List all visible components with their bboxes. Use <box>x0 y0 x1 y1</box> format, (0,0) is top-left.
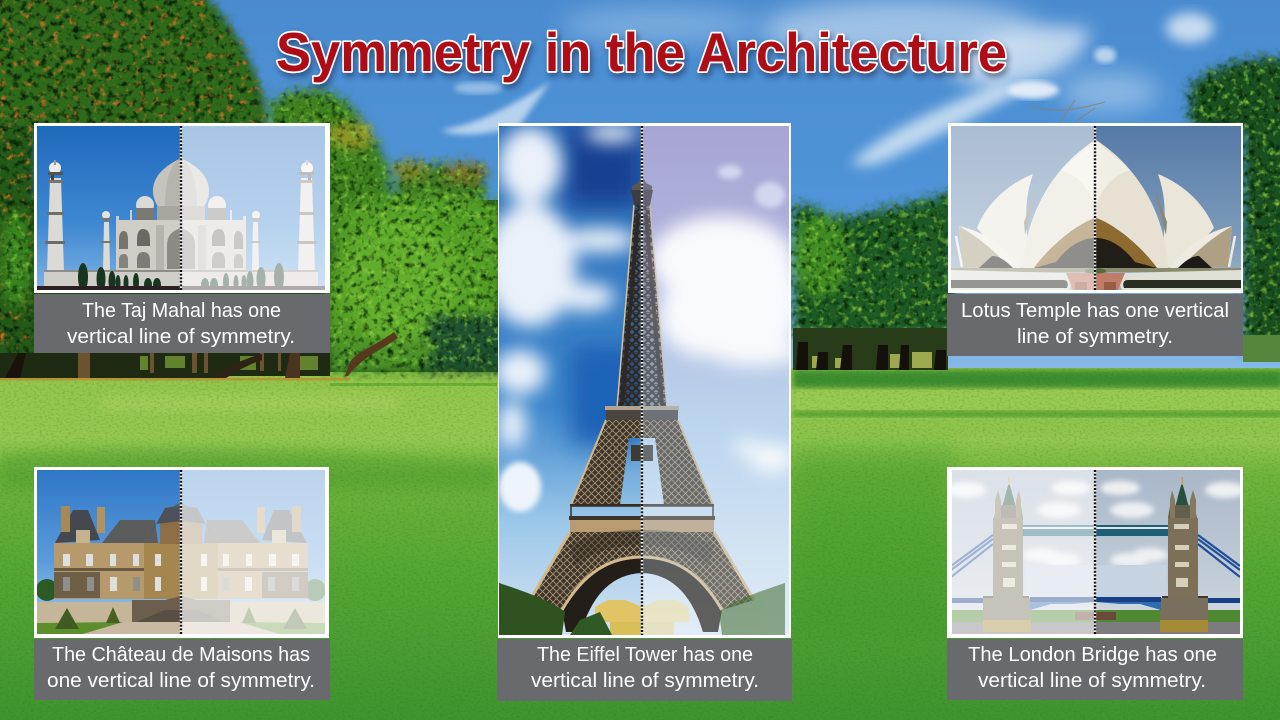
caption: Eiffel Tower: The Eiffel Tower has one <box>537 643 753 666</box>
caption: Chateau de Maisons: The Château de Maisons has <box>52 643 310 666</box>
panel: Eiffel Tower <box>484 123 802 701</box>
photo: London Bridge <box>946 470 1245 634</box>
photo: Taj Mahal <box>37 126 325 292</box>
caption: London Bridge: vertical line of symmetry. <box>978 669 1206 692</box>
title: Symmetry in the Architecture <box>276 21 1007 83</box>
caption: Chateau de Maisons <box>47 643 315 692</box>
panel: Chateau de Maisons <box>34 467 330 700</box>
caption: Taj Mahal <box>67 299 295 348</box>
caption: Eiffel Tower: vertical line of symmetry. <box>531 669 759 692</box>
background: right trees <box>792 58 1280 370</box>
caption: Taj Mahal: vertical line of symmetry. <box>67 325 295 348</box>
panel: London Bridge <box>946 467 1245 700</box>
background: grass lawn <box>0 368 1280 720</box>
photo: Lotus Temple <box>950 126 1241 290</box>
caption: Lotus Temple: Lotus Temple has one vertical <box>961 299 1229 322</box>
caption: Chateau de Maisons: one vertical line of symmetry. <box>47 669 315 692</box>
caption: Eiffel Tower <box>531 643 759 692</box>
caption: Taj Mahal: The Taj Mahal has one <box>82 299 281 322</box>
caption: Lotus Temple <box>961 299 1229 348</box>
caption: London Bridge <box>968 643 1217 692</box>
panel: Lotus Temple <box>947 123 1243 356</box>
background: left trees <box>0 0 505 380</box>
background: sky <box>0 0 1280 400</box>
caption: Lotus Temple: line of symmetry. <box>1017 325 1173 348</box>
photo: Eiffel Tower <box>484 124 802 635</box>
panel: Taj Mahal <box>34 123 330 353</box>
photo: Chateau de Maisons <box>36 470 326 634</box>
caption: London Bridge: The London Bridge has one <box>968 643 1217 666</box>
